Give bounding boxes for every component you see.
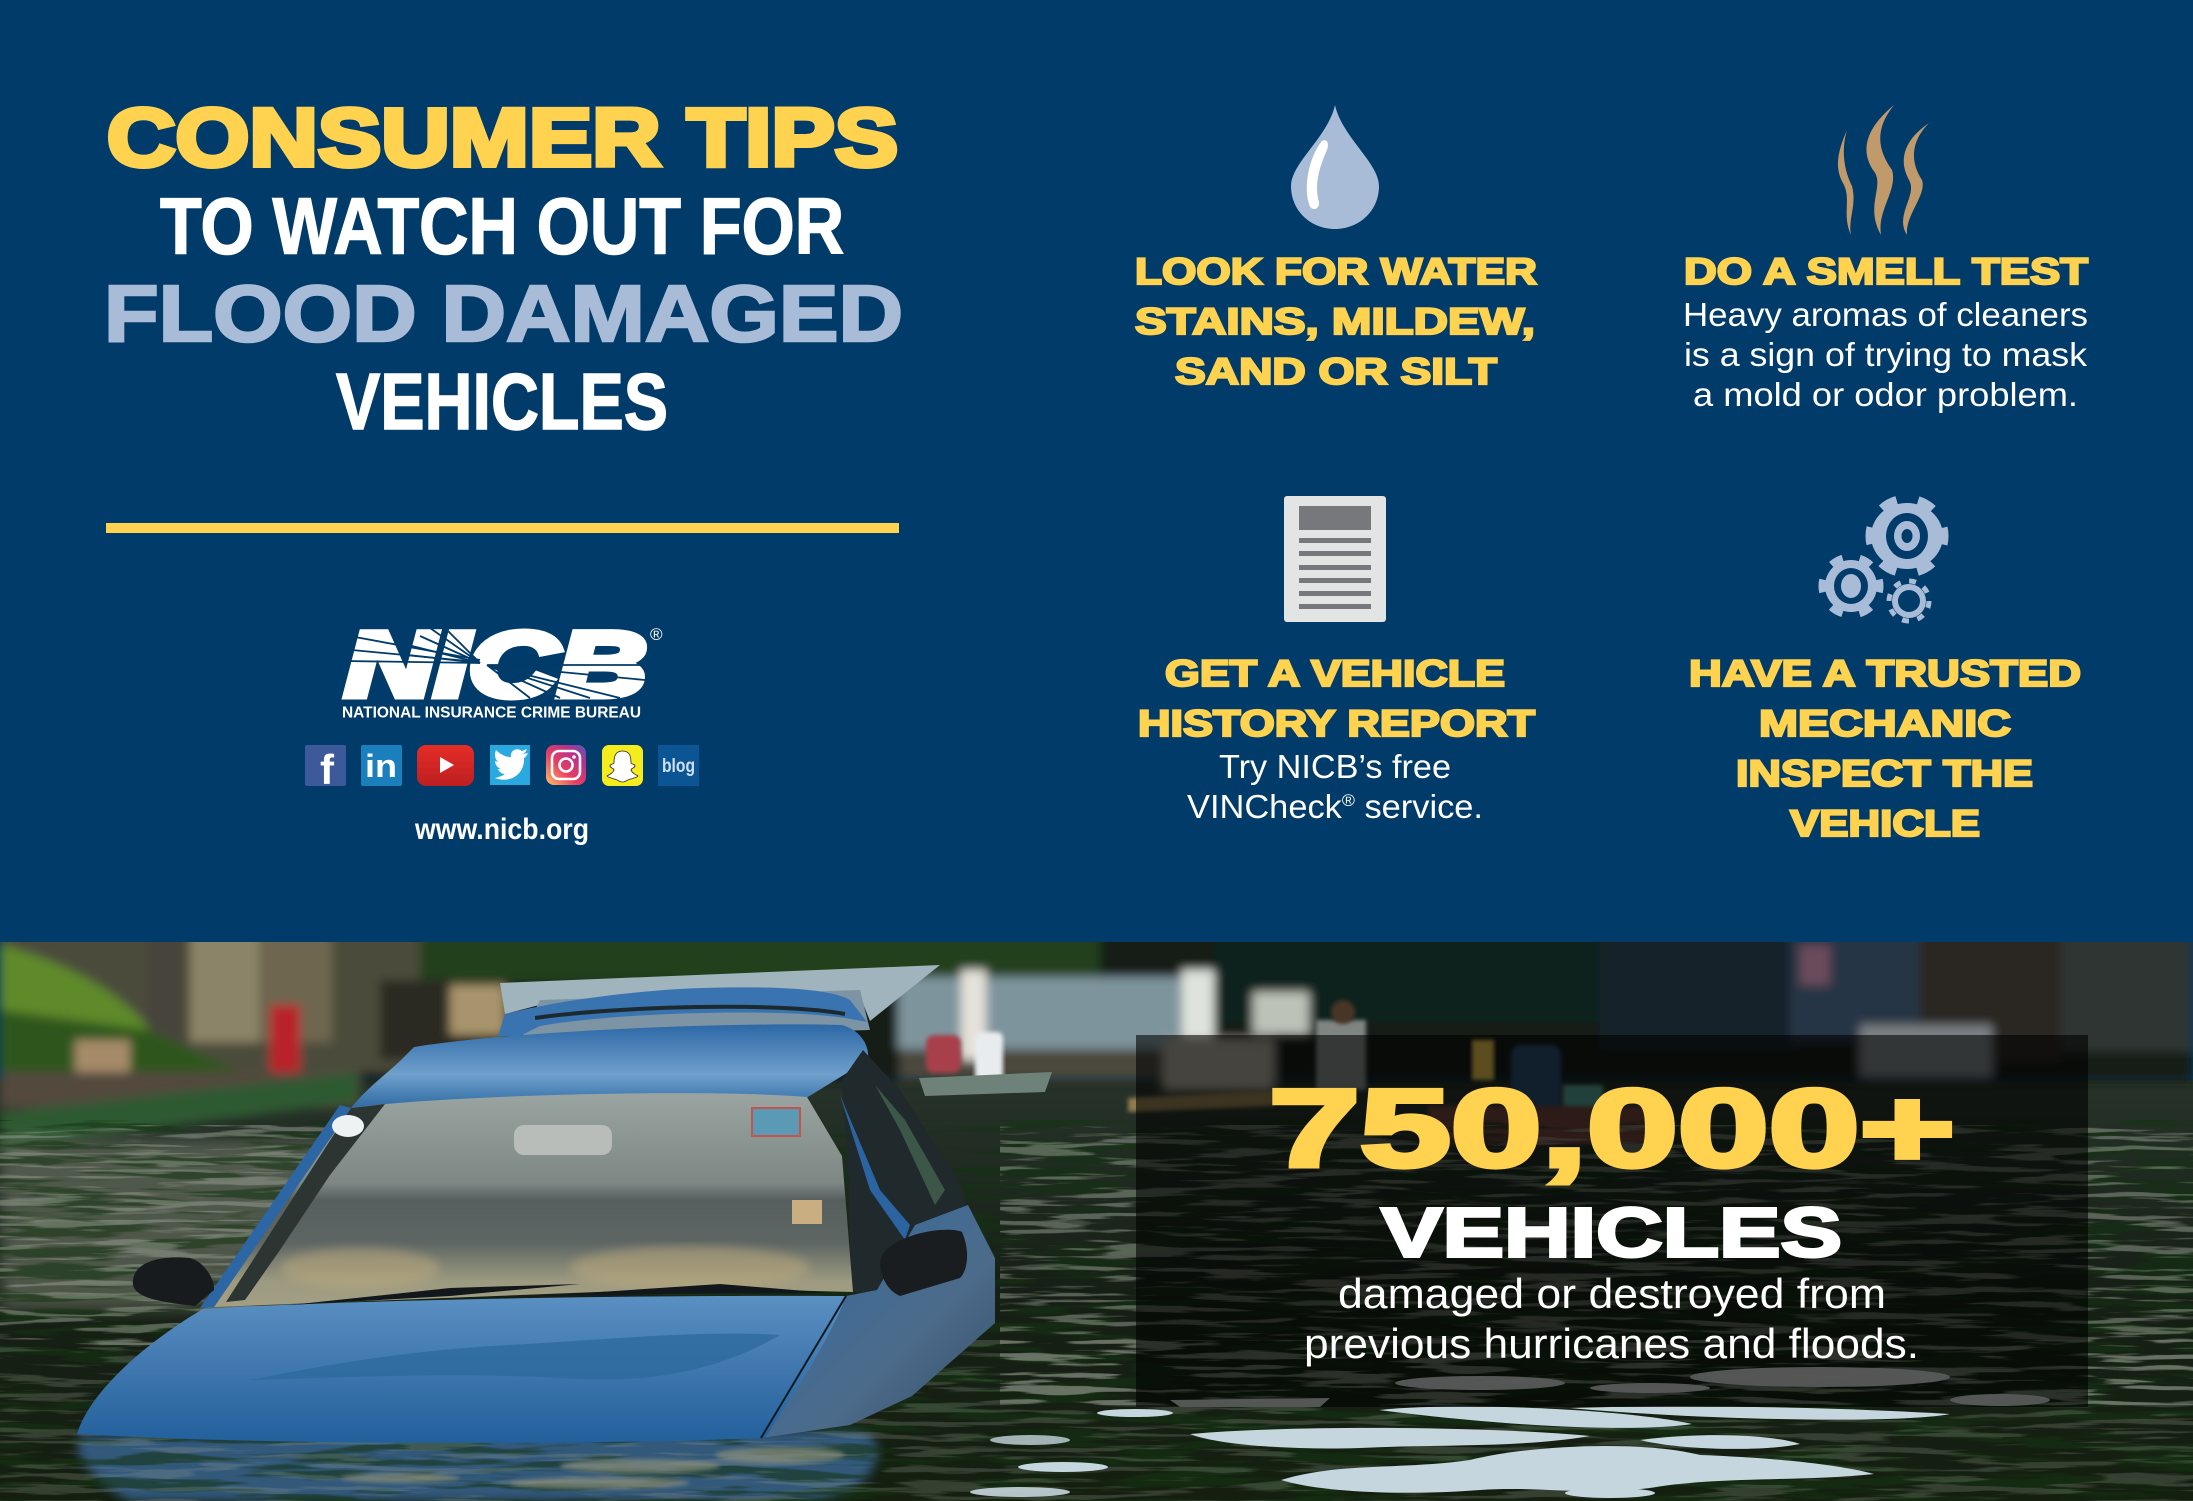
tip body text: Heavy aromas of cleaners xyxy=(1683,296,2088,333)
tip heading xyxy=(1138,653,1535,744)
tip body text: Try NICB’s free xyxy=(1219,748,1451,785)
tip body text xyxy=(1683,296,2088,413)
NICB logo xyxy=(342,614,663,722)
icon: snapchat xyxy=(602,745,643,786)
windshield stickers xyxy=(752,1108,800,1136)
icon: blog: blog xyxy=(662,756,695,777)
left side mirror xyxy=(133,1257,214,1306)
tip heading xyxy=(1135,251,1537,392)
street background scene xyxy=(0,932,2193,1150)
title line: flood damaged: FLOOD DAMAGED xyxy=(104,269,903,358)
icon: document xyxy=(1284,496,1386,622)
car side windows xyxy=(842,1050,968,1294)
tip heading: GET A VEHICLE xyxy=(1165,653,1505,694)
icon: facebook: f xyxy=(320,746,335,793)
tip body text: ® xyxy=(1342,791,1355,810)
car roof xyxy=(351,1024,868,1108)
car body side xyxy=(761,1205,995,1438)
title block xyxy=(104,92,903,446)
wipers xyxy=(290,1284,580,1305)
tip heading: HAVE A TRUSTED xyxy=(1689,653,2081,694)
icon: youtube xyxy=(417,745,474,786)
social media icons xyxy=(305,745,699,793)
photo: flooded street with submerged car xyxy=(0,932,2193,1501)
tip heading: LOOK FOR WATER xyxy=(1135,251,1537,292)
tip heading: STAINS, MILDEW, xyxy=(1135,301,1535,342)
website link: www.nicb.org xyxy=(414,813,589,846)
tip body text xyxy=(1187,748,1483,825)
highlights under stat box xyxy=(1170,1367,2050,1407)
title line: to watch out for: TO WATCH OUT FOR xyxy=(160,182,844,270)
car hood xyxy=(77,1296,846,1443)
icon: smell wisps xyxy=(1838,105,1929,235)
tip heading: SAND OR SILT xyxy=(1175,351,1497,392)
tip heading: VEHICLE xyxy=(1790,803,1980,844)
right side mirror xyxy=(880,1230,967,1296)
tip: vehicle history report xyxy=(1138,496,1535,825)
large gear xyxy=(1863,492,1951,580)
blue car reflection in water xyxy=(77,1430,878,1501)
tip: smell test xyxy=(1683,105,2088,413)
stat description: damaged or destroyed from xyxy=(1338,1270,1886,1317)
water reflections and ripples xyxy=(0,1120,2193,1501)
icon: twitter xyxy=(490,745,530,785)
registered mark: ® xyxy=(650,625,663,644)
car spoiler xyxy=(498,987,867,1036)
icon: gears xyxy=(1816,492,1951,621)
title line: consumer tips: CONSUMER TIPS xyxy=(107,92,898,184)
tip heading: DO A SMELL TEST xyxy=(1684,251,2088,292)
stat label: VEHICLES xyxy=(1381,1194,1842,1272)
tip heading: INSPECT THE xyxy=(1736,753,2033,794)
submerged blue car xyxy=(77,965,995,1443)
logo wordmark: NICB xyxy=(345,614,647,716)
icon: blog xyxy=(658,745,699,786)
tip body text: a mold or odor problem. xyxy=(1693,376,2078,413)
water base xyxy=(0,1080,2193,1501)
small gear xyxy=(1889,581,1929,621)
icon: instagram xyxy=(546,745,586,785)
title line: vehicles: VEHICLES xyxy=(336,357,668,446)
stat description: previous hurricanes and floods. xyxy=(1304,1320,1919,1367)
icon: linkedin: in xyxy=(365,748,397,784)
rear view mirror xyxy=(514,1125,612,1155)
tip body text: service. xyxy=(1355,788,1483,825)
icon: water drop xyxy=(1291,105,1379,229)
bright water highlights xyxy=(970,1406,1950,1498)
icon: linkedin xyxy=(361,745,402,786)
stat description xyxy=(1304,1270,1919,1367)
tip heading: HISTORY REPORT xyxy=(1138,703,1535,744)
car tailgate xyxy=(500,965,940,1021)
callout: vehicle statistic xyxy=(1269,1067,1955,1367)
icon: facebook xyxy=(305,745,346,793)
navy background panel xyxy=(0,0,2193,942)
logo tagline: NATIONAL INSURANCE CRIME BUREAU xyxy=(342,704,641,722)
tip: water stains xyxy=(1135,105,1537,392)
car windshield xyxy=(214,1093,853,1307)
tip body text: is a sign of trying to mask xyxy=(1684,336,2088,373)
tip body text: VINCheck xyxy=(1187,788,1336,825)
tip heading: MECHANIC xyxy=(1759,703,2011,744)
stat number: 750,000+ xyxy=(1269,1067,1955,1190)
people and boat details xyxy=(919,1000,1660,1144)
stat overlay box xyxy=(1136,1035,2088,1407)
tip heading xyxy=(1689,653,2081,844)
medium gear xyxy=(1816,551,1886,621)
tip: trusted mechanic xyxy=(1689,492,2081,844)
